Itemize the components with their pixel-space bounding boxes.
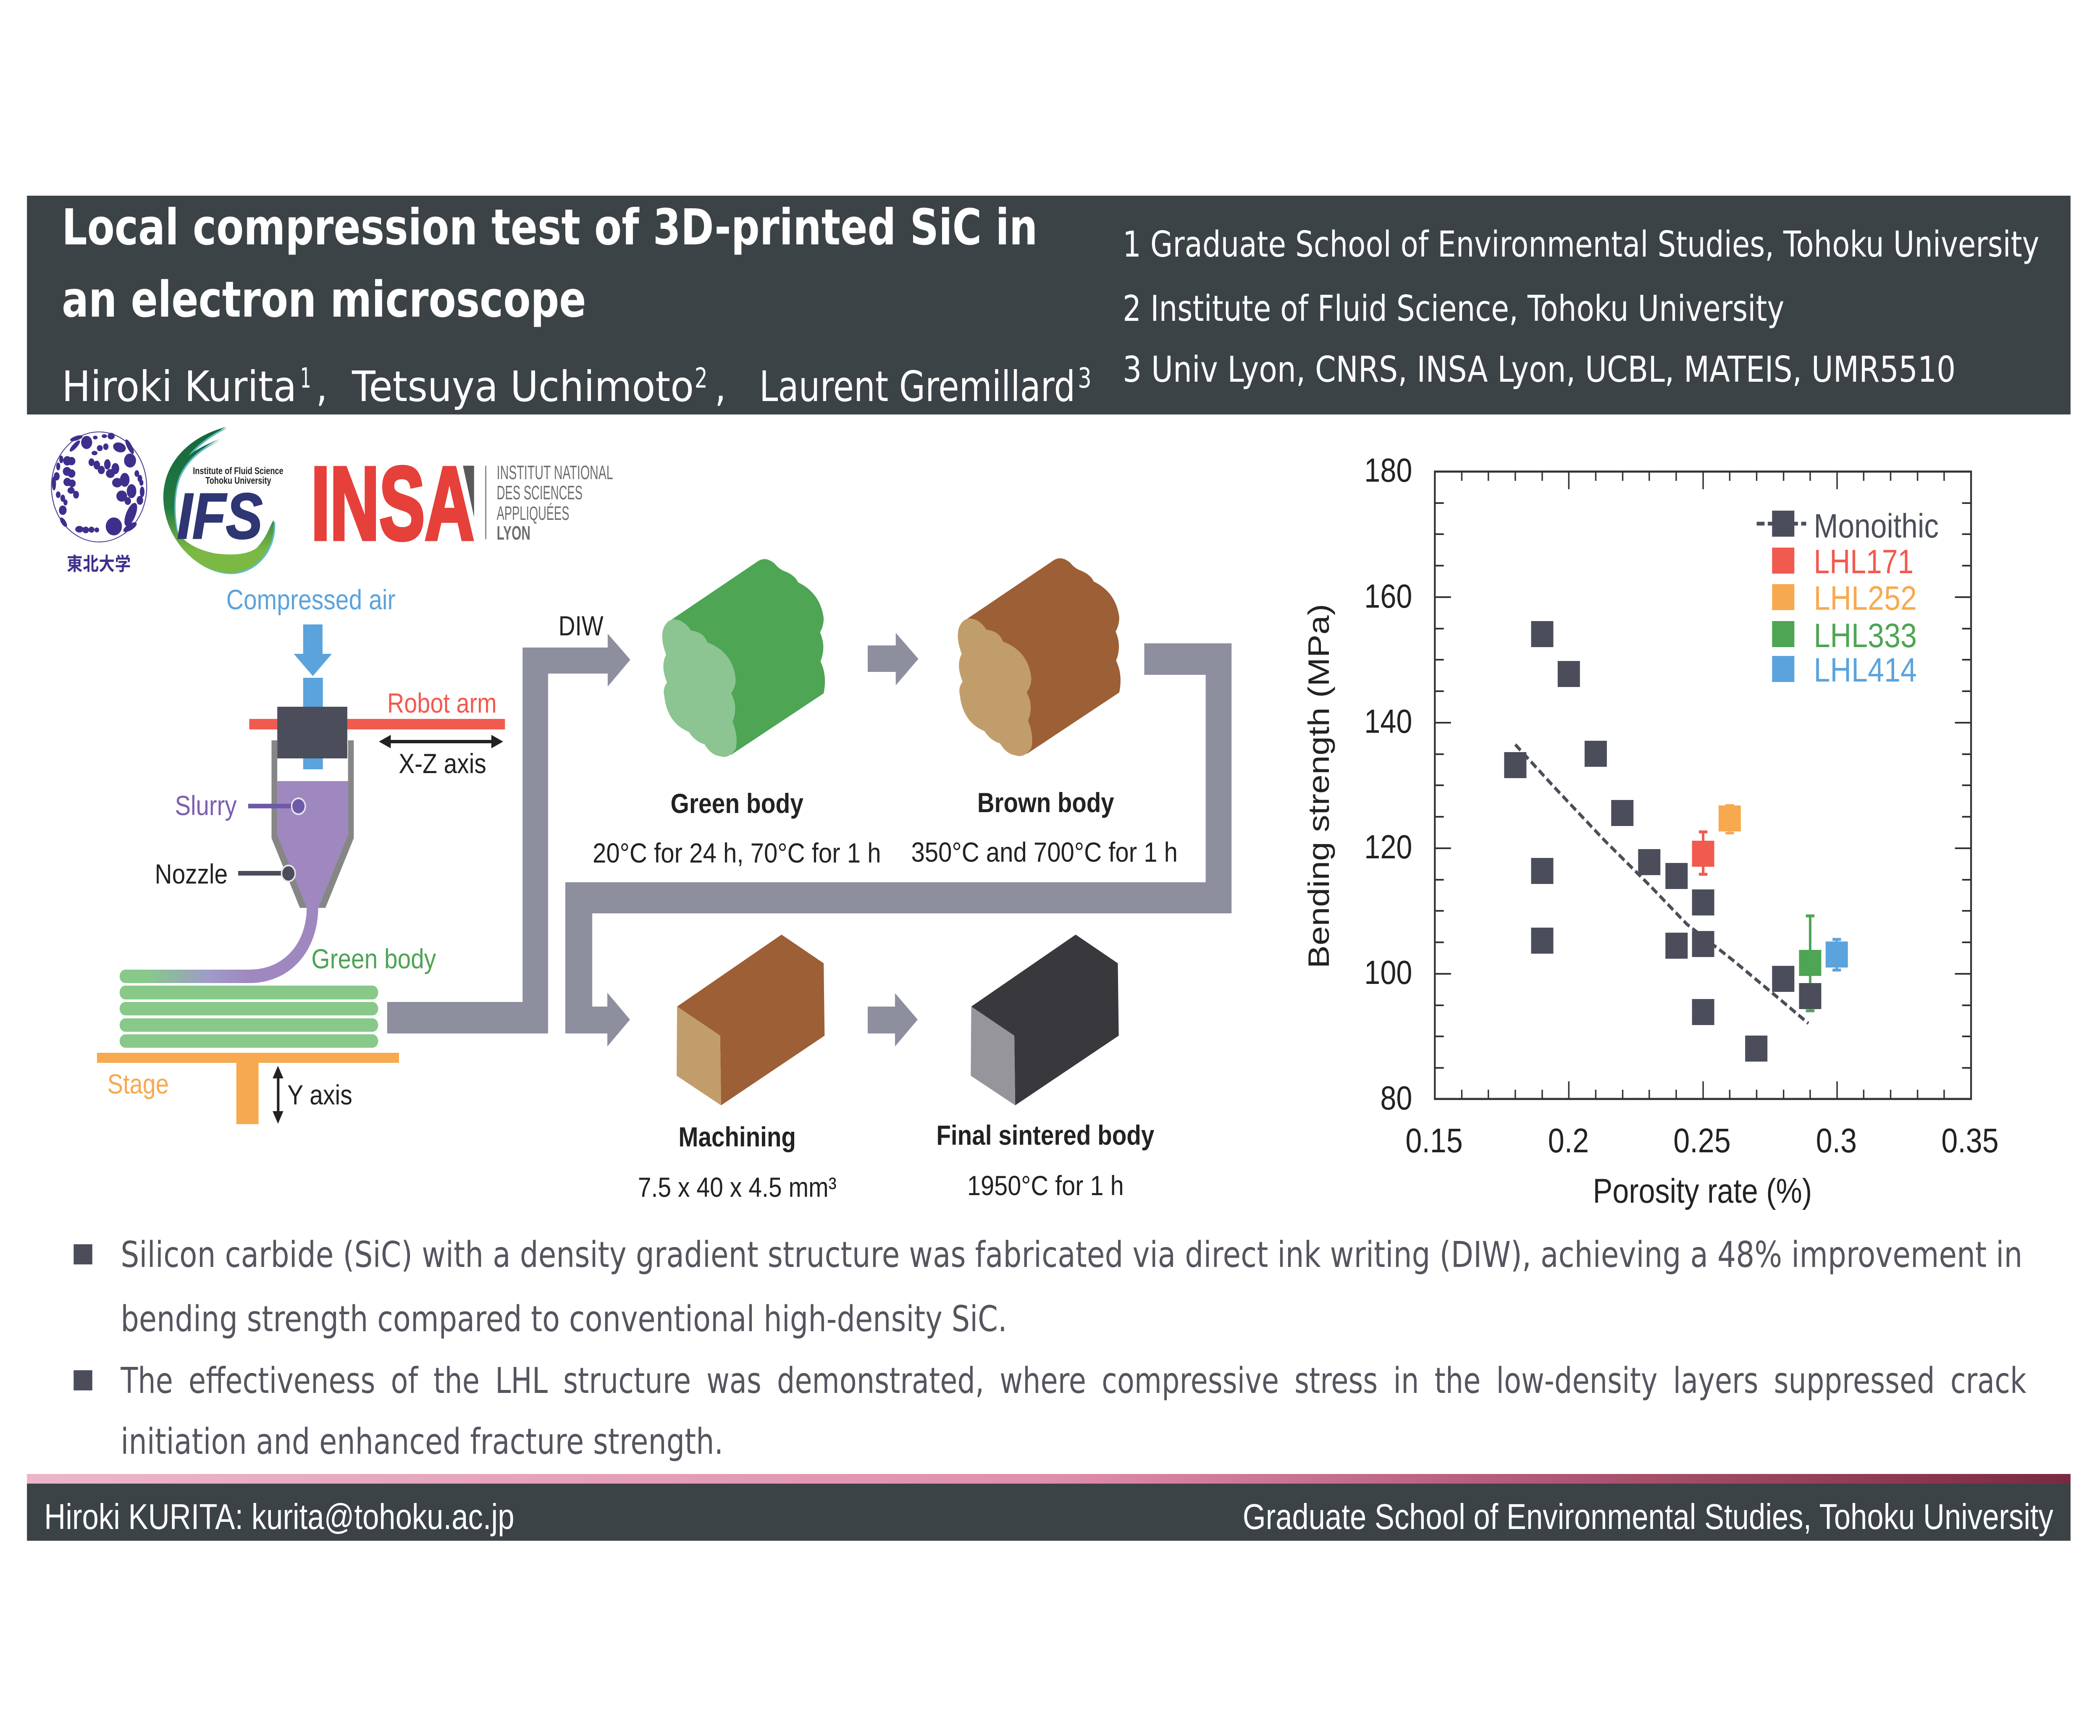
text: brown body step bbox=[911, 787, 1178, 868]
arrow: X-Z axis bbox=[379, 735, 503, 748]
arrow: DIW flow to green body bbox=[387, 634, 630, 1033]
logo: Tohoku University bbox=[51, 432, 147, 574]
text: green body step: 20°C for 24 h, 70°C for 1 h bbox=[593, 838, 881, 869]
series: LHL414 bbox=[1826, 939, 1848, 970]
authors: 1 bbox=[300, 362, 311, 394]
arrow: Y axis bbox=[273, 1066, 284, 1124]
label: compressed air: Compressed air bbox=[226, 585, 396, 616]
text: machining step: 7.5 x 40 x 4.5 mm³ bbox=[638, 1172, 837, 1203]
series: monolithic points bbox=[1504, 621, 1821, 1062]
icon: compressed air arrow bbox=[294, 624, 332, 769]
slurry in syringe bbox=[277, 781, 348, 908]
institution: Graduate School of Environmental Studies, Tohoku University bbox=[1243, 1497, 2053, 1537]
y axis title: Bending strength (MPa) bbox=[1303, 604, 1336, 968]
label: green body: Green body bbox=[311, 944, 436, 975]
legend bbox=[1756, 507, 1939, 689]
icon: green body block bbox=[662, 559, 825, 757]
text: machining step bbox=[638, 1122, 837, 1203]
panel: footer bbox=[27, 1484, 2071, 1541]
authors: , bbox=[316, 362, 328, 411]
x axis tick labels bbox=[1405, 1122, 1999, 1160]
label: robot arm: Robot arm bbox=[387, 688, 497, 719]
logo: INSA Lyon: APPLIQUÉES bbox=[497, 503, 569, 524]
y axis tick labels: 80 bbox=[1380, 1079, 1412, 1117]
text: brown body step: 350°C and 700°C for 1 h bbox=[911, 837, 1178, 868]
text: machining step: Machining bbox=[678, 1122, 796, 1153]
label: stage: Stage bbox=[108, 1069, 169, 1100]
bullet one: bending strength compared to conventional high-density SiC. bbox=[121, 1298, 1007, 1340]
arrow: machining to sintered bbox=[868, 993, 918, 1046]
syringe wall bbox=[271, 740, 354, 908]
logo: INSA Lyon: INSA bbox=[311, 445, 474, 561]
affiliations: 2 Institute of Fluid Science, Tohoku University bbox=[1123, 288, 1784, 329]
authors: , bbox=[715, 362, 726, 411]
text: final sintered step bbox=[936, 1120, 1154, 1201]
gradient divider bar bbox=[27, 1474, 2071, 1484]
series: LHL171 bbox=[1692, 832, 1714, 874]
text block: key findings bbox=[74, 1234, 2026, 1462]
text: green body step bbox=[593, 788, 881, 869]
panel: DIW printer schematic bbox=[97, 585, 505, 1124]
authors: 3 bbox=[1078, 362, 1092, 394]
logo: IFS: IFS bbox=[177, 480, 262, 552]
text: final sintered step: 1950°C for 1 h bbox=[967, 1170, 1124, 1201]
logo: INSA Lyon: LYON bbox=[497, 522, 530, 544]
icon: final sintered block bbox=[971, 935, 1119, 1105]
x axis tick labels: 0.25 bbox=[1673, 1122, 1731, 1160]
logo: Tohoku University: 東北大学 bbox=[67, 553, 131, 574]
x axis title: Porosity rate (%) bbox=[1593, 1172, 1812, 1210]
authors bbox=[62, 362, 1092, 411]
affiliations bbox=[1123, 224, 2039, 390]
authors: Hiroki Kurita bbox=[62, 362, 297, 411]
text: final sintered step: Final sintered body bbox=[936, 1120, 1154, 1151]
x axis tick labels: 0.35 bbox=[1941, 1122, 1999, 1160]
robot arm bbox=[249, 719, 505, 729]
logo: IFS bbox=[163, 427, 284, 574]
label: X-Z axis: X-Z axis bbox=[399, 748, 486, 779]
x axis tick labels: 0.15 bbox=[1405, 1122, 1463, 1160]
label: Y axis: Y axis bbox=[287, 1080, 352, 1111]
syringe head block bbox=[277, 707, 347, 758]
label: DIW: DIW bbox=[559, 611, 604, 642]
legend: LHL333 bbox=[1814, 616, 1917, 654]
affiliations: 3 Univ Lyon, CNRS, INSA Lyon, UCBL, MATEIS, UMR5510 bbox=[1123, 349, 1956, 390]
label: nozzle: Nozzle bbox=[155, 859, 228, 890]
x axis tick labels: 0.2 bbox=[1548, 1122, 1589, 1160]
label: slurry: Slurry bbox=[175, 790, 237, 821]
arrow: brown body to machining bbox=[565, 643, 1231, 1046]
logo: IFS: Tohoku University bbox=[205, 475, 271, 486]
stage bbox=[97, 1053, 399, 1124]
label: nozzle bbox=[155, 859, 295, 890]
authors: Tetsuya Uchimoto bbox=[352, 362, 694, 411]
x axis tick labels: 0.3 bbox=[1816, 1122, 1857, 1160]
y axis tick labels: 180 bbox=[1364, 451, 1412, 489]
y axis tick labels: 140 bbox=[1364, 703, 1412, 740]
legend: Monoithic bbox=[1814, 507, 1939, 545]
y axis tick labels bbox=[1364, 451, 1412, 1117]
bullet one bbox=[74, 1234, 2022, 1340]
bullet one: Silicon carbide (SiC) with a density gradient structure was fabricated via direct ink writing (DIW), achieving a 48% improvement in bbox=[121, 1234, 2022, 1275]
chart: bending strength vs porosity bbox=[1303, 451, 1999, 1210]
legend: LHL171 bbox=[1814, 543, 1914, 580]
affiliations: 1 Graduate School of Environmental Studies, Tohoku University bbox=[1123, 224, 2039, 265]
text: green body step: Green body bbox=[671, 788, 803, 819]
y axis tick labels: 160 bbox=[1364, 577, 1412, 615]
legend: LHL414 bbox=[1814, 651, 1917, 689]
logo: INSA Lyon: INSTITUT NATIONAL bbox=[497, 462, 613, 484]
panel: header band bbox=[27, 196, 2071, 414]
icon: brown body block bbox=[958, 558, 1121, 756]
label: slurry bbox=[175, 790, 305, 821]
bullet two bbox=[74, 1360, 2026, 1462]
y axis tick labels: 120 bbox=[1364, 828, 1412, 865]
icon: machined block bbox=[677, 935, 824, 1105]
arrow: green to brown bbox=[868, 633, 919, 685]
y axis tick labels: 100 bbox=[1364, 954, 1412, 991]
legend: LHL252 bbox=[1814, 579, 1917, 617]
authors: 2 bbox=[695, 362, 708, 394]
logo: INSA Lyon: DES SCIENCES bbox=[497, 482, 583, 504]
trend line bbox=[1515, 745, 1809, 1023]
contact: Hiroki KURITA: kurita@tohoku.ac.jp bbox=[44, 1497, 514, 1537]
series: LHL333 bbox=[1799, 916, 1821, 1011]
title: Local compression test of 3D-printed SiC in bbox=[62, 198, 1037, 256]
extruded filament bbox=[249, 907, 312, 976]
authors: Laurent Gremillard bbox=[759, 362, 1075, 411]
title bbox=[62, 198, 1037, 328]
title: an electron microscope bbox=[62, 270, 586, 328]
bullet two: initiation and enhanced fracture strength. bbox=[121, 1421, 723, 1462]
text: brown body step: Brown body bbox=[977, 787, 1114, 818]
green body layers bbox=[120, 970, 378, 1048]
series: LHL252 bbox=[1719, 805, 1741, 833]
logo: IFS: Institute of Fluid Science bbox=[193, 466, 284, 476]
